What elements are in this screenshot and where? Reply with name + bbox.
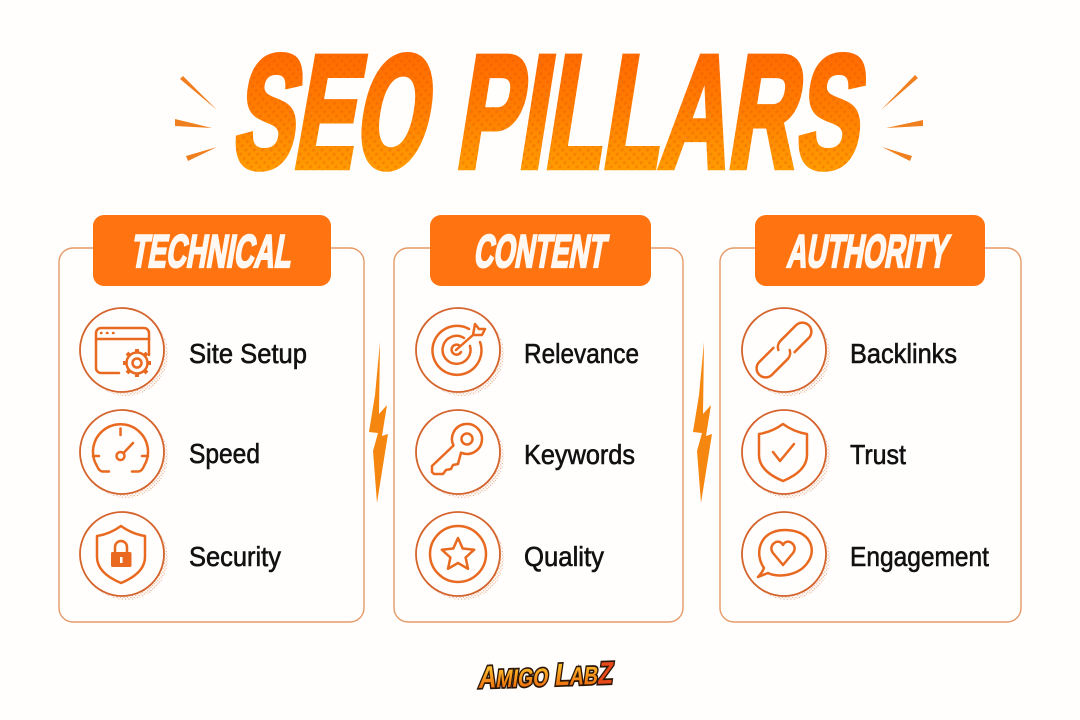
item: security: Security	[189, 541, 281, 572]
item: quality: Quality	[524, 541, 604, 572]
item: keywords: Keywords	[524, 439, 635, 470]
icon: lightning bolt left	[369, 342, 388, 503]
icon: target with arrow	[432, 324, 485, 375]
icon: chain link	[753, 319, 815, 381]
item: trust	[742, 410, 906, 498]
item: backlinks	[742, 308, 957, 396]
heading: technical	[93, 215, 331, 286]
item: relevance	[416, 308, 639, 396]
icon: star in circle	[430, 526, 486, 582]
item: quality	[416, 512, 604, 600]
item: site setup: Site Setup	[189, 338, 307, 369]
title	[224, 23, 879, 202]
logo: Amigo Labz: AMIGO LABZ	[477, 655, 616, 695]
item: speed	[80, 410, 260, 498]
heading: authority: AUTHORITY	[784, 225, 953, 277]
item: site setup	[80, 308, 307, 396]
item: relevance: Relevance	[524, 338, 639, 369]
icon: browser window with gear	[96, 328, 151, 377]
icon: shield with check	[759, 424, 807, 481]
item: security	[80, 512, 281, 600]
panel: technical	[59, 215, 364, 622]
icon: shield with padlock	[97, 526, 145, 583]
item: trust: Trust	[850, 439, 906, 470]
icon: speech bubble with heart	[758, 530, 812, 577]
heading: authority	[755, 215, 985, 286]
icon: right burst rays	[881, 75, 923, 161]
icon: left burst rays	[175, 76, 217, 161]
heading: content: CONTENT	[471, 225, 611, 277]
heading: technical: TECHNICAL	[128, 225, 297, 277]
title: SEO	[224, 23, 448, 202]
icon: lightning bolt right	[693, 342, 712, 503]
icon: key	[432, 424, 482, 474]
item: speed: Speed	[189, 438, 260, 469]
item: keywords	[416, 410, 635, 498]
icon: speedometer	[93, 424, 148, 472]
item: engagement: Engagement	[850, 541, 989, 572]
item: backlinks: Backlinks	[850, 338, 957, 369]
heading: content	[430, 215, 651, 286]
panel: content	[394, 215, 683, 622]
panel: authority	[720, 215, 1021, 622]
item: engagement	[742, 512, 989, 600]
